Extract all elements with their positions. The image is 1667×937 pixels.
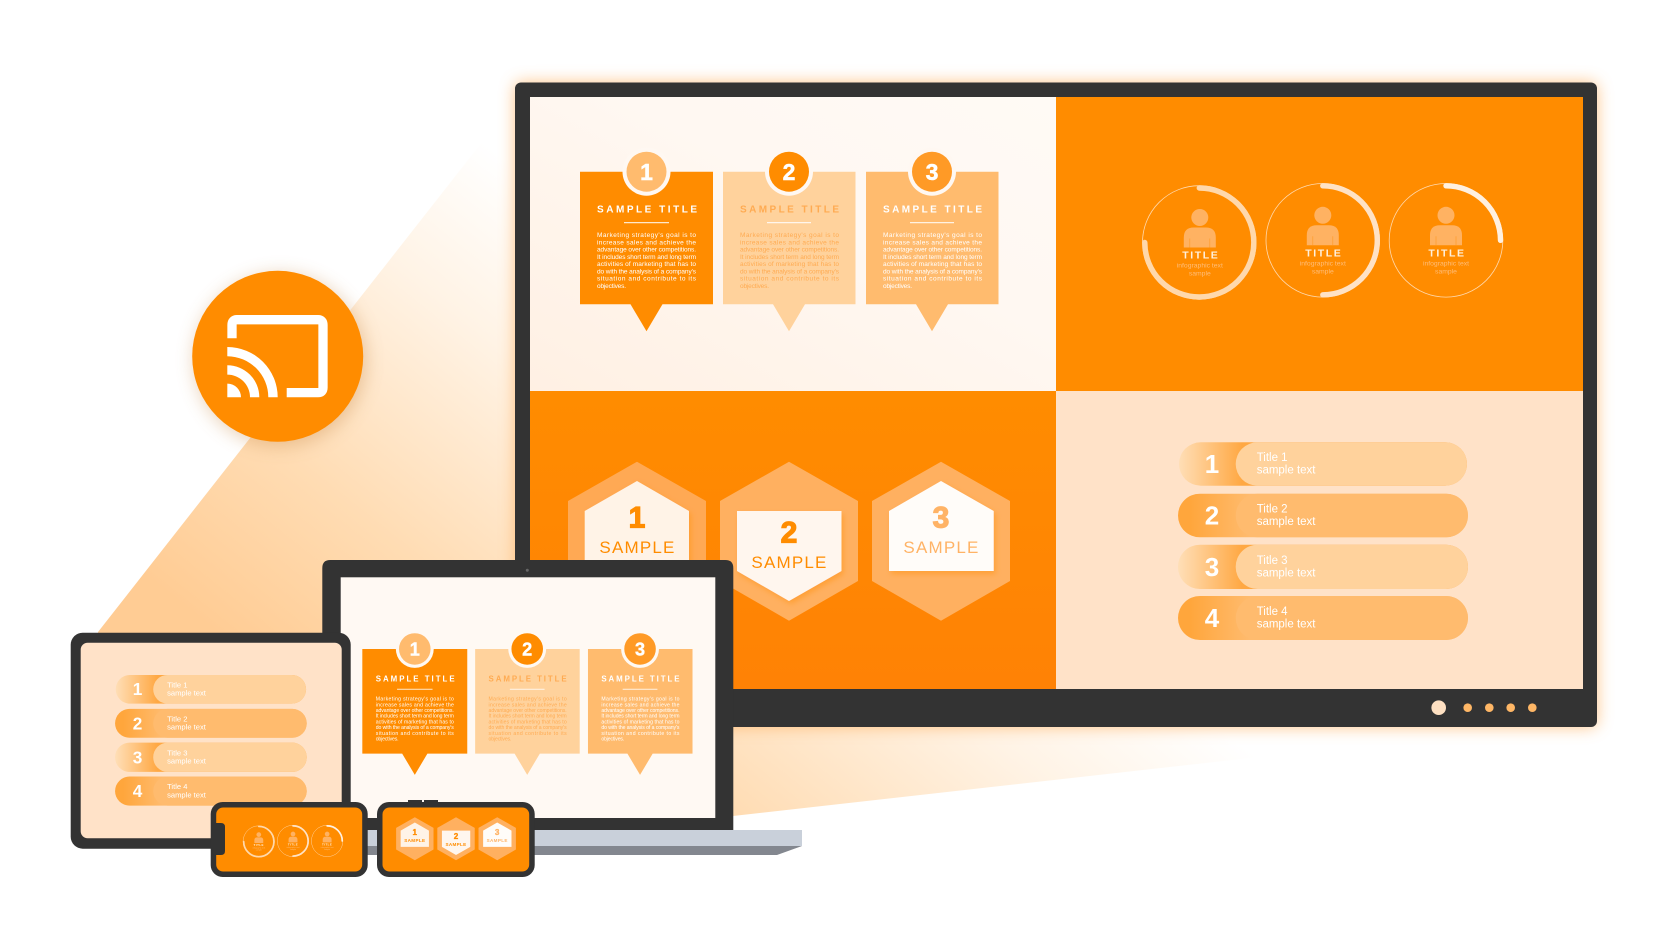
hexagon 2: SAMPLE: [751, 553, 828, 572]
card 1: Marketing strategy's goal is to: [597, 232, 696, 239]
ring 3: sample: [1435, 268, 1457, 275]
phone 1 screen: [216, 808, 362, 872]
card 1: [580, 148, 713, 331]
monitor bezel: [515, 82, 1597, 727]
phone 1 rings: infographic text: [287, 846, 300, 849]
card 2: 2: [783, 159, 795, 185]
tablet pill 3: Title 3: [167, 748, 187, 757]
panel: bottom-right background: [1056, 391, 1583, 689]
pill 2: Title 2: [1257, 504, 1288, 516]
laptop card 1: Marketing strategy's goal is to: [376, 696, 454, 702]
phone 1 rings: [243, 825, 343, 857]
laptop card 2: objectives.: [489, 737, 511, 743]
card 3: objectives.: [883, 283, 912, 290]
phone 2 buttons: [408, 800, 438, 802]
card 2: SAMPLE TITLE: [740, 205, 839, 216]
tablet pill 3: sample text: [167, 757, 207, 766]
cast icon badge: [192, 271, 366, 446]
tablet pill 1: [116, 675, 306, 704]
pill 2: 2: [1205, 500, 1219, 530]
card 1: increase sales and achieve the: [597, 239, 696, 246]
ring 3: infographic text: [1423, 260, 1469, 267]
laptop card 2: [475, 630, 580, 775]
card 1: 1: [640, 159, 653, 185]
ring 1: [1142, 186, 1256, 299]
card 3: advantage over other competitions.: [883, 246, 982, 254]
card 2: objectives.: [740, 283, 769, 290]
laptop card 1: advantage over other competitions.: [376, 708, 454, 714]
tablet pill 4: [115, 777, 307, 806]
laptop card 3: objectives.: [601, 737, 624, 743]
laptop card 2: advantage over other competitions.: [489, 708, 567, 714]
ring 1: infographic text: [1177, 262, 1223, 270]
projection beam background: [98, 100, 1530, 830]
phone 1 rings: TITLE: [322, 842, 332, 846]
tablet pill 4: 4: [133, 781, 143, 801]
tablet body: [71, 633, 351, 849]
pill 4: [1178, 596, 1468, 640]
tablet pill 1: Title 1: [167, 680, 187, 689]
pill 2: sample text: [1257, 516, 1316, 528]
laptop card 3: activities of marketing that has to: [601, 719, 680, 725]
pill 1: Title 1: [1257, 452, 1288, 464]
ring 1: sample: [1189, 270, 1211, 278]
laptop card 1: do with the analysis of a company's: [376, 725, 454, 731]
card 3: do with the analysis of a company's: [883, 268, 983, 275]
laptop: [254, 560, 802, 855]
phone 1 body: [211, 802, 368, 877]
card 2: It includes short term and long term: [740, 254, 839, 261]
pill 3: sample text: [1257, 568, 1316, 580]
hexagon badges on monitor: [568, 462, 1010, 621]
tablet: [71, 633, 351, 849]
ring 3: TITLE: [1428, 247, 1466, 259]
pill 3: [1178, 545, 1468, 589]
ring 2: [1266, 184, 1380, 297]
hexagon 2: [720, 462, 858, 621]
pill 2: [1178, 494, 1468, 537]
laptop lid: [322, 560, 733, 830]
tablet pill list: [115, 675, 307, 806]
tablet pill 4: sample text: [167, 790, 207, 799]
laptop callout cards: [362, 630, 693, 775]
laptop card 1: objectives.: [376, 737, 399, 743]
phone 1 rings: sample: [256, 850, 262, 852]
card 3: [866, 148, 998, 331]
laptop screen: [341, 577, 715, 818]
pill list on monitor: [1178, 442, 1468, 640]
phone 1 rings: sample: [290, 849, 296, 851]
laptop card 2: activities of marketing that has to: [489, 719, 567, 725]
hexagon 1: [568, 462, 706, 621]
tablet pill 2: [115, 709, 307, 738]
panel: bottom-left background: [530, 391, 1056, 689]
laptop card 1: increase sales and achieve the: [376, 702, 454, 708]
laptop card 3: increase sales and achieve the: [601, 702, 680, 708]
laptop card 1: It includes short term and long term: [376, 714, 454, 720]
laptop card 3: 3: [635, 639, 645, 659]
laptop card 3: It includes short term and long term: [601, 714, 679, 720]
laptop card 3: [588, 630, 693, 775]
tablet pill 2: Title 2: [167, 714, 187, 723]
card 3: SAMPLE TITLE: [883, 205, 982, 216]
phone 2 hexagons: [396, 817, 516, 860]
card 2: [723, 148, 856, 331]
hexagon 1: 1: [629, 502, 645, 534]
pill 1: 1: [1205, 449, 1219, 479]
card 2: increase sales and achieve the: [740, 239, 839, 246]
card 3: situation and contribute to its: [883, 276, 983, 282]
hexagon 1: SAMPLE: [599, 538, 676, 557]
card 3: Marketing strategy's goal is to: [883, 232, 982, 239]
phone 1 rings: TITLE: [254, 843, 264, 847]
phone 2 hexagons: SAMPLE: [445, 842, 467, 847]
laptop card 2: situation and contribute to its: [489, 731, 567, 737]
laptop card 2: increase sales and achieve the: [489, 702, 567, 708]
laptop camera: [526, 569, 529, 572]
card 1: advantage over other competitions.: [597, 246, 696, 254]
pill 4: Title 4: [1257, 606, 1288, 618]
card 3: It includes short term and long term: [883, 254, 982, 261]
tablet pill 2: sample text: [167, 723, 207, 732]
phone 2 hexagons: SAMPLE: [404, 838, 425, 843]
laptop card 1: 1: [410, 639, 420, 659]
laptop card 3: Marketing strategy's goal is to: [601, 696, 680, 702]
laptop card 1: [362, 630, 467, 775]
pill 3: Title 3: [1257, 555, 1288, 567]
card 3: increase sales and achieve the: [883, 239, 982, 246]
panel: top-right background: [1056, 97, 1583, 391]
monitor: [515, 82, 1597, 727]
pill 3: 3: [1205, 552, 1219, 582]
monitor glow: [515, 82, 1597, 727]
hexagon 3: 3: [933, 502, 949, 534]
laptop card 1: situation and contribute to its: [376, 731, 454, 737]
hexagon 3: SAMPLE: [903, 538, 980, 557]
phone 2 screen: [382, 808, 529, 872]
phone 1 rings: sample: [324, 849, 330, 851]
laptop card 3: SAMPLE TITLE: [601, 674, 679, 683]
tablet pill 2: 2: [133, 713, 142, 733]
icon: cast symbol: [227, 320, 323, 397]
card 1: activities of marketing that has to: [597, 261, 696, 268]
phone 2 hexagons: SAMPLE: [487, 838, 508, 843]
ring 1: TITLE: [1182, 250, 1219, 262]
callout cards on monitor: [580, 148, 998, 331]
card 2: situation and contribute to its: [740, 276, 840, 282]
pill 1: [1179, 442, 1467, 486]
hexagon 2: 2: [781, 516, 797, 550]
laptop card 2: Marketing strategy's goal is to: [489, 696, 567, 702]
card 1: do with the analysis of a company's: [597, 268, 697, 275]
laptop card 3: advantage over other competitions.: [601, 708, 679, 714]
tablet pill 3: 3: [133, 747, 142, 767]
laptop base: [254, 830, 802, 855]
ring 3: [1389, 184, 1503, 297]
card 1: SAMPLE TITLE: [597, 205, 697, 216]
phone 2 hexagons: 1: [413, 828, 418, 837]
laptop card 3: situation and contribute to its: [601, 731, 680, 737]
tablet pill 1: sample text: [167, 689, 207, 698]
phone with rings: [211, 802, 368, 877]
laptop card 3: do with the analysis of a company's: [601, 725, 680, 731]
laptop card 2: do with the analysis of a company's: [489, 725, 567, 731]
phone 1 notch: [216, 823, 225, 855]
phone 2 hexagons: 3: [495, 828, 500, 837]
phone with hexagons: [377, 800, 535, 877]
pill 1: sample text: [1257, 464, 1316, 476]
card 3: activities of marketing that has to: [883, 261, 982, 268]
ring 2: infographic text: [1300, 260, 1346, 267]
card 2: activities of marketing that has to: [740, 261, 839, 268]
phone 1 rings: TITLE: [288, 842, 298, 846]
laptop card 2: SAMPLE TITLE: [489, 674, 567, 683]
tablet pill 1: 1: [133, 679, 143, 699]
laptop card 1: activities of marketing that has to: [376, 719, 454, 725]
laptop card 2: 2: [522, 639, 532, 659]
card 1: situation and contribute to its: [597, 276, 697, 282]
tablet pill 4: Title 4: [167, 782, 187, 791]
laptop card 1: SAMPLE TITLE: [376, 674, 455, 683]
card 2: Marketing strategy's goal is to: [740, 232, 839, 239]
phone 1 rings: infographic text: [252, 846, 266, 849]
card 1: It includes short term and long term: [597, 254, 696, 261]
ring 2: TITLE: [1305, 247, 1342, 259]
phone 1 rings: infographic text: [321, 846, 334, 849]
card 2: advantage over other competitions.: [740, 246, 839, 254]
card 3: 3: [926, 159, 938, 185]
card 2: do with the analysis of a company's: [740, 268, 840, 275]
card 1: objectives.: [597, 283, 626, 290]
tablet screen: [81, 643, 342, 838]
laptop card 2: It includes short term and long term: [489, 714, 567, 720]
phone 2 hexagons: 2: [454, 832, 459, 841]
hexagon 3: [872, 462, 1010, 621]
ring 2: sample: [1312, 268, 1334, 275]
monitor indicator dots: [1431, 700, 1537, 715]
progress rings on monitor: [1142, 184, 1503, 299]
pill 4: sample text: [1257, 618, 1316, 630]
phone 2 body: [377, 802, 535, 877]
panel: top-left background: [530, 97, 1056, 391]
tablet pill 3: [115, 743, 307, 772]
pill 4: 4: [1205, 603, 1220, 633]
